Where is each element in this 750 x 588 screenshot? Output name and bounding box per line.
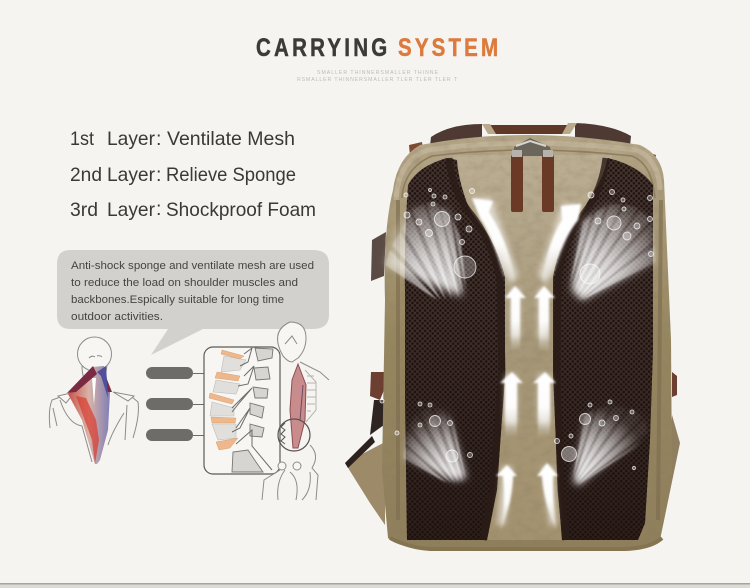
bubbles	[380, 188, 654, 470]
curved arrow left	[472, 198, 516, 282]
spray upper right	[570, 203, 656, 300]
layer 1: 1st	[70, 128, 95, 150]
layer 1: Layer	[107, 128, 155, 150]
backpack	[345, 123, 680, 549]
layer 2: :	[156, 164, 161, 186]
curved arrow right	[541, 204, 581, 282]
spray lower left	[403, 407, 466, 483]
title	[256, 33, 498, 61]
mesh left	[405, 158, 505, 540]
fourth row arrows	[496, 465, 517, 532]
layer 1	[70, 128, 295, 150]
zipper pulls	[511, 138, 554, 212]
tags: three grey pills	[146, 367, 229, 441]
layer list	[70, 128, 316, 221]
canvas mottling	[382, 135, 672, 548]
subtitle: SMALLER THINNERSMALLER THINNE	[317, 70, 439, 76]
illustration: side skeleton	[262, 322, 329, 500]
layer 3	[70, 198, 316, 221]
spray lower right	[573, 404, 648, 485]
vertebrae processes	[232, 348, 273, 472]
callout text: outdoor activities.	[71, 311, 163, 323]
title: SYSTEM	[398, 33, 498, 61]
callout text	[71, 260, 314, 323]
layer 1: Ventilate Mesh	[167, 128, 295, 150]
ribs	[305, 370, 316, 422]
subtitle	[297, 70, 458, 83]
callout text: to reduce the load on shoulder muscles and	[71, 277, 298, 289]
mesh edge bands	[449, 158, 502, 540]
illustration: back muscles	[49, 337, 138, 464]
mesh right	[553, 158, 653, 540]
layer 1: :	[156, 128, 161, 150]
vertebrae bodies	[210, 356, 246, 440]
layer 3: 3rd	[70, 199, 98, 221]
side straps	[345, 232, 680, 530]
discs	[209, 350, 244, 450]
second row arrows	[505, 286, 526, 350]
layer 2: Layer	[107, 164, 155, 186]
airflow arrows	[472, 198, 581, 532]
title: CARRYING	[256, 33, 387, 61]
layer 3: :	[156, 198, 161, 220]
illustration: spine inset	[204, 347, 280, 474]
subtitle: RSMALLER THINNERSMALLER TLER TLER TLER T	[297, 77, 458, 83]
callout text: Anti-shock sponge and ventilate mesh are used	[71, 260, 314, 272]
bottom binding	[390, 538, 662, 549]
side seam	[398, 200, 661, 520]
muscle fill	[67, 366, 112, 464]
callout text: backbones.Espically suitable for long time	[71, 294, 284, 306]
spray upper left	[385, 202, 466, 300]
callout bubble	[57, 250, 329, 355]
airflow sprays	[380, 188, 656, 485]
body	[382, 135, 672, 548]
layer 2: 2nd	[70, 164, 102, 186]
layer 2: Relieve Sponge	[166, 164, 296, 186]
layer 3: Layer	[107, 199, 155, 221]
center panel	[450, 155, 612, 540]
top binding	[396, 143, 660, 200]
layer 3: Shockproof Foam	[166, 199, 316, 221]
arrow glow	[474, 198, 580, 525]
facet joints	[232, 348, 272, 470]
layer 2	[70, 164, 296, 186]
spine muscle	[290, 364, 306, 448]
third row arrows	[500, 372, 523, 436]
top handle	[409, 123, 656, 160]
